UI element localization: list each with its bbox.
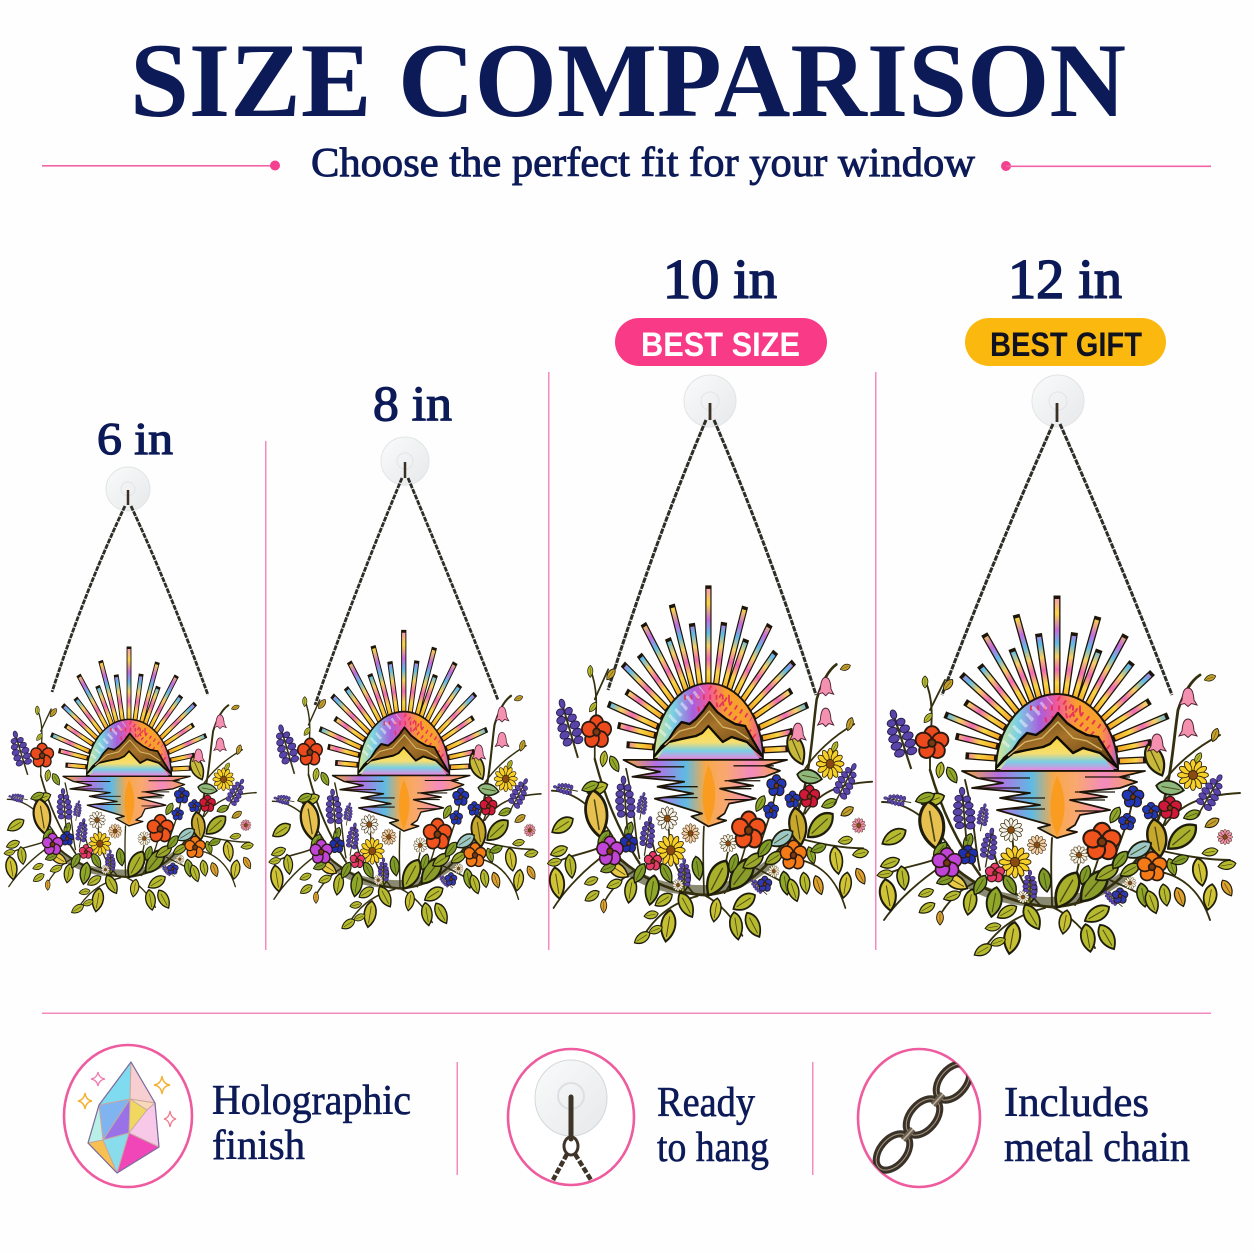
text: includes metal chain <box>1004 1080 1190 1171</box>
footer dividers <box>456 1062 814 1175</box>
icon: holographic gem <box>64 1045 192 1187</box>
6 in suncatcher <box>4 467 256 916</box>
label: 12 in: 12 in <box>1008 249 1122 311</box>
text: ready to hang <box>657 1080 769 1171</box>
subtitle <box>42 139 1211 185</box>
title: SIZE COMPARISON <box>130 22 1126 139</box>
column dividers <box>265 372 876 950</box>
label: 6 in: 6 in <box>97 413 173 464</box>
text: includes metal chain: metal chain <box>1004 1125 1190 1171</box>
badge: best size <box>615 318 827 366</box>
subtitle: Choose the perfect fit for your window <box>311 139 975 185</box>
8 in suncatcher <box>268 437 541 932</box>
text: ready to hang: to hang <box>657 1125 769 1171</box>
text: includes metal chain: Includes <box>1004 1080 1149 1126</box>
badge: best gift: BEST GIFT <box>990 326 1142 364</box>
badge: best gift <box>965 318 1166 366</box>
text: holographic finish <box>212 1078 411 1169</box>
10 in suncatcher <box>547 375 872 947</box>
footer rule <box>42 1012 1211 1014</box>
text: holographic finish: Holographic <box>212 1078 411 1124</box>
12 in suncatcher <box>876 375 1240 959</box>
badge: best size: BEST SIZE <box>641 326 800 364</box>
icon: suction cup and hook <box>508 1049 634 1185</box>
text: ready to hang: Ready <box>657 1080 755 1126</box>
label: 10 in: 10 in <box>663 249 777 311</box>
text: holographic finish: finish <box>212 1123 305 1169</box>
icon: metal chain <box>858 1049 980 1187</box>
label: 8 in: 8 in <box>373 375 452 431</box>
